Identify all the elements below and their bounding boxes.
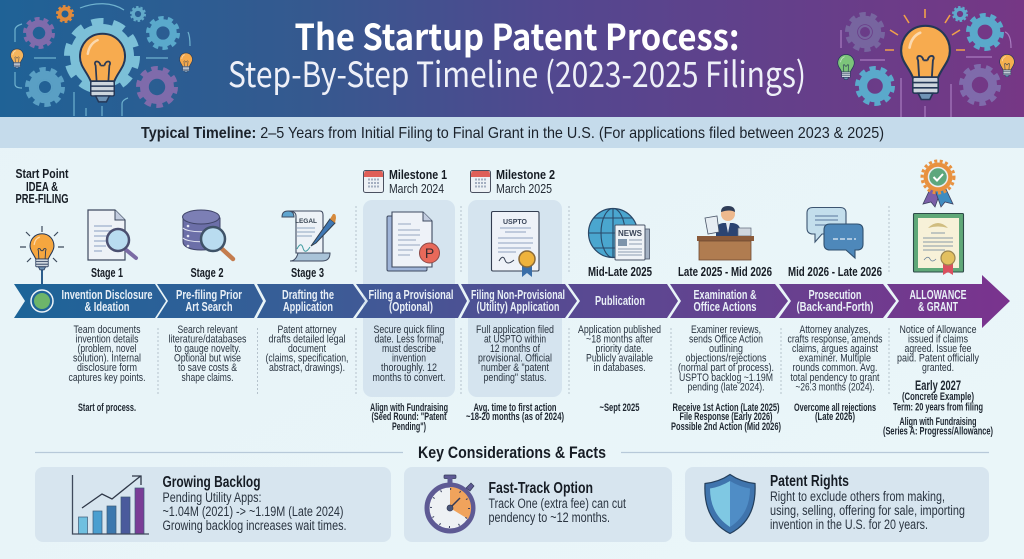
step 8: prosecution (779, 284, 896, 318)
text: allowance description: Notice of Allowance (900, 324, 976, 336)
step 4: provisional: Filing a Provisional (368, 288, 454, 302)
text: examination description: File Response (Early 2026) (680, 411, 773, 423)
panel: milestone 1 highlight (363, 200, 455, 397)
text: stage 3 description: Patent attorney (278, 324, 337, 336)
text: allowance description: (Concrete Example) (902, 391, 974, 403)
icon: provisional document: P (425, 245, 434, 261)
milestone 1 header: Milestone 1 (389, 167, 447, 182)
icon: start lightbulb (20, 226, 64, 284)
step 9: allowance and grant: ALLOWANCE (910, 288, 966, 302)
text: provisional description (370, 324, 448, 433)
text: stage 1 description: Team documents (74, 324, 141, 336)
text: stage 1 description: (problem, novel (78, 343, 136, 355)
step 4: provisional: (Optional) (389, 300, 433, 314)
text: non-provisional description: ~18-20 months (as of 2024) (466, 411, 564, 423)
step 7: examination: Office Actions (694, 300, 757, 314)
step 2: pre-filing search (157, 284, 263, 318)
step 5: non-provisional (461, 284, 577, 318)
backlog text: Growing Backlog (162, 474, 260, 491)
text: stage 1 description: captures key points. (68, 372, 146, 384)
text: provisional description: Secure quick filing (374, 324, 444, 336)
text: allowance description (883, 324, 993, 438)
text: examination description: USPTO backlog ~1.19M (679, 372, 773, 384)
stage 3 icon and label (282, 211, 336, 280)
text: stage 1 description (68, 324, 146, 414)
step 1: invention disclosure: & Ideation (84, 300, 130, 314)
icon: provisional document (387, 212, 440, 271)
title (228, 9, 806, 98)
illustration: right lightbulb and gears (838, 7, 1014, 117)
step 1: invention disclosure: Invention Disclosure (62, 288, 153, 302)
text: non-provisional description: 12 months of (490, 343, 541, 355)
examination icon and date (678, 206, 772, 279)
step 9: allowance and grant (887, 275, 1010, 328)
text: prosecution description: Overcome all rejections (794, 402, 876, 414)
text: publication description: priority date. (596, 343, 644, 355)
start point marker (31, 290, 53, 312)
timeline arrow band (14, 275, 1010, 328)
panel: patent rights (685, 467, 989, 542)
milestone 1 header: March 2024 (389, 182, 444, 196)
step 7: examination (670, 284, 788, 318)
step 8: prosecution: Prosecution (808, 288, 862, 302)
text: allowance description: agreed. Issue fee (904, 343, 972, 355)
backlog text: Pending Utility Apps: (162, 490, 262, 505)
text: examination description: objections/rejections (686, 352, 767, 364)
title: The Startup Patent Process: (294, 9, 740, 61)
step 6: publication: Publication (595, 294, 645, 308)
stopwatch icon (427, 475, 474, 531)
start point label (16, 167, 69, 206)
text: non-provisional description: pending" status. (484, 372, 546, 384)
text: stage 3 description: abstract, drawings). (269, 362, 345, 374)
text: non-provisional description: provisional. Official (478, 352, 552, 364)
publication icon and date (588, 208, 652, 279)
text: provisional description: months to convert. (372, 372, 446, 384)
fast-track text (488, 480, 626, 525)
text: stage 2 description: Optional but wise (174, 352, 241, 364)
milestone 2 header: Milestone 2 (496, 167, 555, 182)
text: allowance description: issued if claims (908, 334, 968, 346)
step 2: pre-filing search: Pre-filing Prior (176, 288, 242, 302)
text: examination description: (normal part of process). (678, 362, 774, 374)
text: allowance description: Align with Fundraising (900, 416, 976, 428)
milestone 1 header (364, 167, 447, 196)
step 5: non-provisional: Filing Non-Provisional (471, 288, 565, 302)
heading: key considerations: Key Considerations & Facts (418, 443, 606, 462)
backlog text: ~1.04M (2021) -> ~1.19M (Late 2024) (162, 504, 344, 519)
panel: milestone 2 highlight (468, 200, 562, 397)
text: publication description: Application published (578, 324, 661, 336)
stage 3 icon and label: LEGAL (295, 218, 317, 225)
text: allowance description: granted. (922, 362, 954, 374)
icon: USPTO application (492, 212, 539, 277)
text: publication description: ~18 months after (586, 334, 653, 346)
stage 1 icon and label (88, 210, 136, 280)
prosecution icon and date: Mid 2026 - Late 2026 (788, 265, 882, 279)
examination icon and date: Late 2025 - Mid 2026 (678, 265, 772, 279)
start point label: PRE-FILING (16, 192, 68, 206)
text: publication description: Publicly available (586, 352, 653, 364)
text: non-provisional description: number & "patent (481, 362, 549, 374)
icon: calendar (364, 170, 384, 192)
stage 2 icon and label: Stage 2 (190, 266, 224, 280)
backlog text: Growing backlog increases wait times. (162, 518, 346, 533)
rights text: invention in the U.S. for 20 years. (770, 517, 928, 532)
text: stage 1 description: disclosure form (77, 362, 137, 374)
text: provisional description: date. Less formal, (374, 334, 444, 346)
rights text: Patent Rights (770, 473, 849, 490)
text: prosecution description: examiner. Multiple (799, 352, 871, 364)
step 6: publication (568, 284, 678, 318)
panel: fast-track option (404, 467, 672, 542)
fast-track text: pendency to ~12 months. (488, 510, 610, 525)
stage 1 icon and label: Stage 1 (91, 266, 123, 280)
publication icon and date: NEWS (618, 229, 643, 238)
step 9: allowance and grant: & GRANT (918, 300, 958, 314)
text: examination description: Possible 2nd Action (Mid 2026) (671, 421, 781, 433)
step 2: pre-filing search: Art Search (186, 300, 232, 314)
text: stage 2 description: to gauge novelty. (174, 343, 240, 355)
text: prosecution description: (Late 2026) (815, 411, 855, 423)
stage 3 icon and label: Stage 3 (291, 266, 324, 280)
text: stage 3 description: (claims, specification, (266, 352, 348, 364)
fast-track text: Track One (extra fee) can cut (488, 496, 626, 511)
text: stage 2 description: to save costs & (178, 362, 238, 374)
text: stage 3 description (266, 324, 348, 374)
text: examination description: outlining (709, 343, 743, 355)
publication icon and date: Mid-Late 2025 (588, 265, 652, 279)
shield icon (705, 474, 755, 534)
text: provisional description: Pending") (392, 421, 426, 433)
rights text: Right to exclude others from making, (770, 489, 945, 504)
panel: growing backlog (35, 467, 391, 542)
rights text (770, 473, 965, 532)
backlog text (162, 474, 346, 533)
text: allowance description: paid. Patent officially (897, 352, 979, 364)
text: stage 1 description: solution). Internal (73, 352, 141, 364)
text: prosecution description: ~26.3 months (2024). (796, 382, 874, 394)
bar chart icon (72, 475, 149, 534)
text: examination description: Receive 1st Action (Late 2025) (672, 402, 780, 414)
text: provisional description: Align with Fundraising (370, 402, 448, 414)
text: stage 1 description: Start of process. (78, 402, 136, 414)
timeline summary band: Typical Timeline: 2–5 Years from Initial Filing to Final Grant in the U.S. (For applications filed between 2023 & 2025) (141, 125, 884, 142)
text: examination description: sends Office Action (689, 334, 763, 346)
text: stage 3 description: drafts detailed legal (268, 334, 346, 346)
text: stage 1 description: invention details (76, 334, 139, 346)
milestone 2 header: March 2025 (496, 182, 552, 196)
text: provisional description: thoroughly. 12 (381, 362, 437, 374)
text: provisional description: invention (392, 352, 426, 364)
text: non-provisional description: Full application filed (476, 324, 554, 336)
stage 2 icon and label (182, 210, 233, 280)
text: prosecution description: Attorney analyzes, (800, 324, 870, 336)
text: examination description: Examiner reviews, (691, 324, 761, 336)
text: examination description (671, 324, 781, 433)
icon: USPTO application: USPTO (503, 219, 528, 226)
step 1: invention disclosure (14, 284, 166, 318)
step 8: prosecution: (Back-and-Forth) (796, 300, 874, 314)
text: examination description: pending (late 2024). (688, 382, 764, 394)
text: non-provisional description: at USPTO within (484, 334, 546, 346)
start point label: IDEA & (26, 180, 58, 194)
illustration: left lightbulb and gears (11, 4, 192, 116)
text: allowance description: Early 2027 (915, 378, 961, 393)
prosecution icon and date (788, 208, 882, 279)
text: allowance description: Term: 20 years from filing (893, 402, 983, 414)
text: stage 3 description: document (288, 343, 326, 355)
step 3: drafting (257, 284, 365, 318)
rights text: using, selling, offering for sale, importing (770, 503, 965, 518)
timeline summary band (0, 117, 1024, 148)
text: prosecution description (788, 324, 883, 423)
icon: award badge (922, 161, 954, 207)
text: prosecution description: rounds common. Avg. (792, 362, 878, 374)
step 7: examination: Examination & (694, 288, 756, 302)
text: prosecution description: claims, argues against (792, 343, 878, 355)
text: publication description: ~Sept 2025 (600, 402, 640, 414)
text: provisional description: (Seed Round: "Patent (372, 411, 447, 423)
start point label: Start Point (16, 167, 69, 181)
step 3: drafting: Application (283, 300, 333, 314)
step 4: provisional (356, 284, 467, 318)
text: stage 2 description: literature/databases (168, 334, 247, 346)
text: stage 2 description (168, 324, 247, 384)
icon: calendar (470, 170, 490, 192)
text: stage 2 description: shape claims. (182, 372, 234, 384)
text: stage 2 description: Search relevant (178, 324, 238, 336)
header banner (0, 0, 1024, 117)
text: prosecution description: crafts response, amends (788, 334, 883, 346)
text: publication description: in databases. (594, 362, 646, 374)
text: non-provisional description (466, 324, 564, 423)
fast-track text: Fast-Track Option (488, 480, 593, 497)
text: publication description (578, 324, 661, 414)
step 3: drafting: Drafting the (282, 288, 334, 302)
title: Step-By-Step Timeline (2023-2025 Filings) (228, 47, 806, 98)
text: prosecution description: total pendency to grant (790, 372, 880, 384)
step 5: non-provisional: (Utility) Application (476, 300, 560, 314)
text: non-provisional description: Avg. time to first action (474, 402, 556, 414)
icon: grant certificate (914, 214, 964, 275)
text: provisional description: must describe (382, 343, 436, 355)
milestone 2 header (470, 167, 555, 196)
